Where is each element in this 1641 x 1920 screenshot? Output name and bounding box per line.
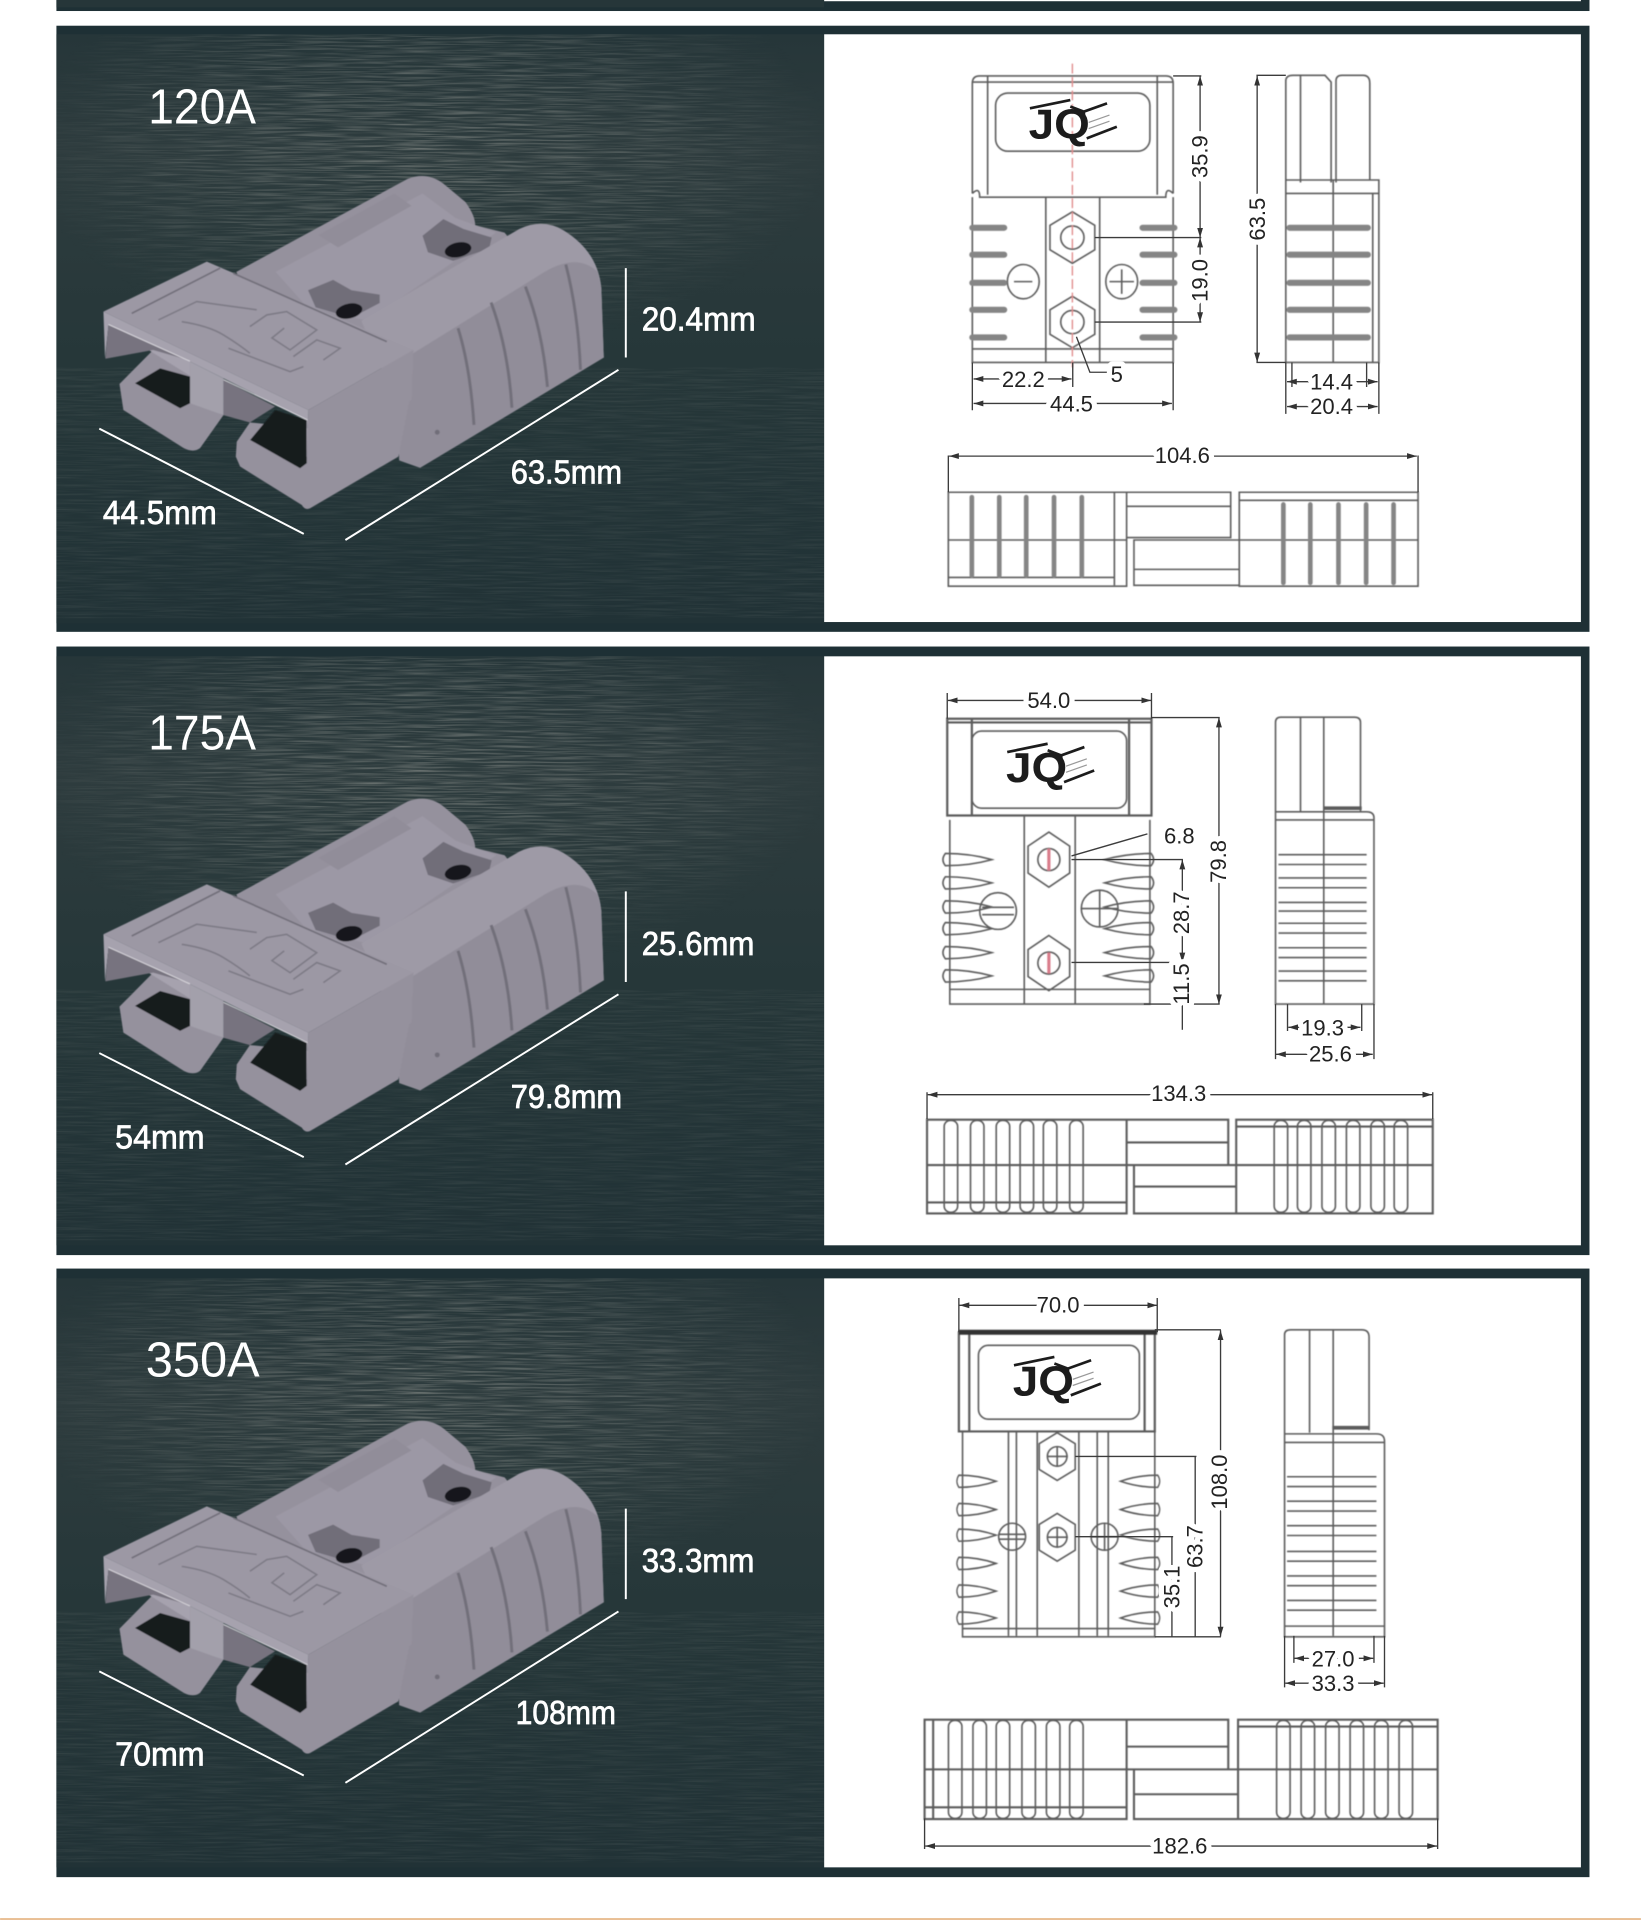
dimension lines 120A front (972, 76, 1212, 416)
JQ logo 175A (1006, 744, 1094, 791)
dimension lines 175A side: 19.3 (1301, 1015, 1344, 1040)
dimension callouts 175A: 79.8mm (511, 1079, 622, 1116)
dimension lines 120A side: 14.4 (1310, 369, 1353, 394)
panel 175A frame (56, 647, 1589, 1255)
side view 120A (1286, 75, 1379, 362)
front view 175A (943, 719, 1154, 1004)
dimension lines 120A front: 35.9 (1187, 135, 1212, 178)
dimension line 175A bottom: 134.3 (1151, 1081, 1206, 1106)
dimension lines 350A side (1285, 1636, 1384, 1696)
side view 175A (1276, 717, 1374, 1004)
dimension lines 120A side (1245, 75, 1379, 419)
dimension lines 350A side: 33.3 (1312, 1671, 1355, 1696)
panel 120A white drawing area (824, 34, 1581, 622)
dimension lines 175A front (947, 688, 1231, 1030)
dimension callouts 120A: 44.5mm (103, 495, 217, 532)
dimension callouts 175A: 54mm (115, 1120, 205, 1157)
dimension line 350A bottom (925, 1818, 1438, 1858)
panel 350A white drawing area (824, 1278, 1581, 1867)
technical drawing 120A (948, 64, 1418, 586)
panel: 350A (56, 1269, 1589, 1877)
dimension lines 120A side: 20.4 (1310, 394, 1353, 419)
dimension callouts 175A (99, 891, 754, 1164)
panel 120A frame (56, 26, 1589, 632)
technical drawing 350A (925, 1293, 1438, 1858)
dimension lines 120A front: 19.0 (1187, 259, 1212, 302)
connector photo 120A (103, 176, 604, 509)
panel 120A photo side background (56, 34, 824, 623)
panel 175A white drawing area (824, 656, 1581, 1245)
bottom view 120A (948, 492, 1418, 586)
dimension line 120A bottom: 104.6 (1155, 443, 1210, 468)
dimension callouts 120A: 20.4mm (642, 302, 756, 339)
bottom view 350A (925, 1720, 1438, 1819)
dimension lines 175A front: 79.8 (1206, 840, 1231, 883)
technical drawing 175A (927, 688, 1433, 1213)
panel: 120A (56, 26, 1589, 632)
panel 350A photo side background (56, 1278, 824, 1867)
dimension lines 175A front: 54.0 (1027, 688, 1070, 713)
dimension callouts 350A: 70mm (115, 1737, 205, 1774)
dimension callouts 175A: 25.6mm (642, 926, 754, 963)
JQ logo 120A: JQ (1029, 100, 1090, 147)
dimension callouts 350A: 108mm (516, 1695, 616, 1732)
JQ logo 175A: JQ (1006, 744, 1067, 791)
heading: 350A: 350A (146, 1333, 260, 1387)
dimension lines 350A front: 70.0 (1037, 1293, 1079, 1318)
dimension lines 175A front: 11.5 (1169, 963, 1194, 1005)
dimension lines 175A front: 28.7 (1169, 891, 1194, 934)
front view 350A (957, 1332, 1160, 1637)
dimension lines 350A front (959, 1293, 1232, 1637)
bottom edge strip (0, 1918, 1641, 1920)
side view 350A (1285, 1330, 1384, 1637)
front view 120A (972, 64, 1174, 367)
heading: 175A: 175A (148, 706, 256, 760)
dimension lines 175A front: 6.8 (1164, 824, 1195, 849)
heading: 120A: 120A (148, 81, 256, 135)
panel 350A frame (56, 1269, 1589, 1877)
bottom view 175A (927, 1120, 1433, 1213)
dimension lines 120A front: 44.5 (1050, 391, 1093, 416)
dimension lines 350A front: 63.7 (1183, 1525, 1208, 1568)
connector photo 350A (103, 1421, 604, 1754)
JQ logo 350A (1013, 1357, 1101, 1404)
JQ logo 120A (1029, 100, 1117, 147)
JQ logo 350A: JQ (1013, 1357, 1074, 1404)
dimension callouts 350A: 33.3mm (642, 1543, 754, 1580)
dimension lines 350A side: 27.0 (1312, 1647, 1355, 1672)
dimension lines 120A front: 22.2 (1002, 367, 1045, 392)
dimension lines 120A front: 5 (1111, 362, 1123, 387)
dimension lines 120A side: 63.5 (1245, 198, 1270, 241)
dimension line 350A bottom: 182.6 (1152, 1833, 1207, 1858)
dimension lines 175A side (1276, 1004, 1374, 1067)
dimension lines 350A front: 35.1 (1159, 1565, 1184, 1608)
dimension lines 350A front: 108.0 (1207, 1455, 1232, 1510)
dimension callouts 350A (99, 1509, 754, 1783)
dimension line 120A bottom (948, 443, 1418, 492)
panel: 175A (56, 647, 1589, 1255)
dimension line 175A bottom (927, 1081, 1433, 1119)
dimension callouts 120A (99, 268, 756, 540)
panel 175A photo side background (56, 656, 824, 1245)
dimension callouts 120A: 63.5mm (511, 455, 622, 492)
dimension lines 175A side: 25.6 (1309, 1042, 1352, 1067)
top partial panel strip (56, 0, 1589, 11)
connector photo 175A (103, 799, 604, 1132)
